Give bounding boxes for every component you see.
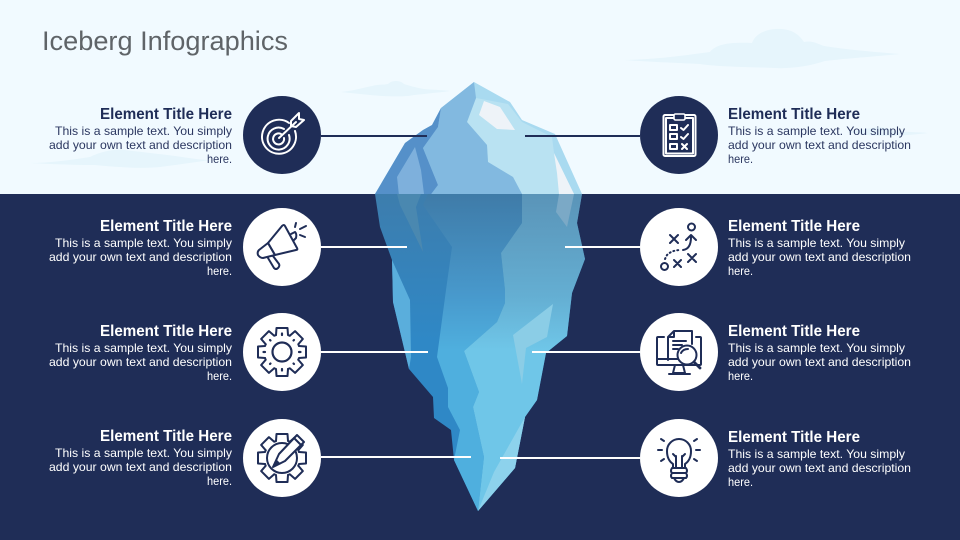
icon: light bulb [640, 419, 718, 497]
right item 4 description: This is a sample text. You simply [728, 447, 905, 461]
cloud: small right [846, 127, 928, 136]
iceberg below water [375, 194, 585, 511]
left item 1 description: here. [207, 152, 232, 166]
right item 4 heading: Element Title Here [728, 429, 860, 446]
left item 3 heading: Element Title Here [100, 323, 232, 340]
left item 4 heading: Element Title Here [100, 428, 232, 445]
right item 1 description: here. [728, 152, 753, 166]
right item 1 heading: Element Title Here [728, 106, 860, 123]
icon: monitor with document and magnifier [640, 313, 718, 391]
icon: gear [243, 313, 321, 391]
left item 2 heading: Element Title Here [100, 218, 232, 235]
right item 4 description: add your own text and description [728, 461, 911, 475]
right item 4 [640, 419, 911, 497]
left item 3 description: This is a sample text. You simply [55, 341, 232, 355]
left item 2 [49, 208, 321, 286]
cloud: top right [624, 29, 900, 68]
cloud: left [30, 150, 210, 168]
right item 2 description: This is a sample text. You simply [728, 236, 905, 250]
left item 2 description: This is a sample text. You simply [55, 236, 232, 250]
left item 4 description: here. [207, 474, 232, 488]
right item 2 description: here. [728, 264, 753, 278]
title: Iceberg Infographics [42, 26, 288, 56]
right item 2 [640, 208, 911, 286]
left item 1 description: This is a sample text. You simply [55, 124, 232, 138]
iceberg above water [375, 82, 582, 194]
water background [0, 194, 960, 540]
right item 3 description: here. [728, 369, 753, 383]
right item 2 description: add your own text and description [728, 250, 911, 264]
iceberg [375, 82, 585, 511]
right item 2 heading: Element Title Here [728, 218, 860, 235]
left item 1 heading: Element Title Here [100, 106, 232, 123]
left item 3 description: add your own text and description [49, 355, 232, 369]
right item 1 description: add your own text and description [728, 138, 911, 152]
right item 1 [640, 96, 911, 174]
left item 2 description: here. [207, 264, 232, 278]
left item 1 [49, 96, 321, 174]
icon: gear with pencil [243, 419, 321, 497]
icon: target [243, 96, 321, 174]
icon: checklist clipboard [640, 96, 718, 174]
left item 1 description: add your own text and description [49, 138, 232, 152]
right item 3 description: add your own text and description [728, 355, 911, 369]
icon: megaphone [243, 208, 321, 286]
left item 3 [49, 313, 321, 391]
left item 2 description: add your own text and description [49, 250, 232, 264]
left item 4 description: This is a sample text. You simply [55, 446, 232, 460]
cloud: upper centre [341, 81, 450, 96]
right item 3 heading: Element Title Here [728, 323, 860, 340]
sky background [0, 0, 960, 194]
right item 3 description: This is a sample text. You simply [728, 341, 905, 355]
connector lines [321, 135, 640, 459]
right item 1 description: This is a sample text. You simply [728, 124, 905, 138]
left item 3 description: here. [207, 369, 232, 383]
right item 4 description: here. [728, 475, 753, 489]
left item 4 [49, 419, 321, 497]
left item 4 description: add your own text and description [49, 460, 232, 474]
icon: strategy play [640, 208, 718, 286]
right item 3 [640, 313, 911, 391]
